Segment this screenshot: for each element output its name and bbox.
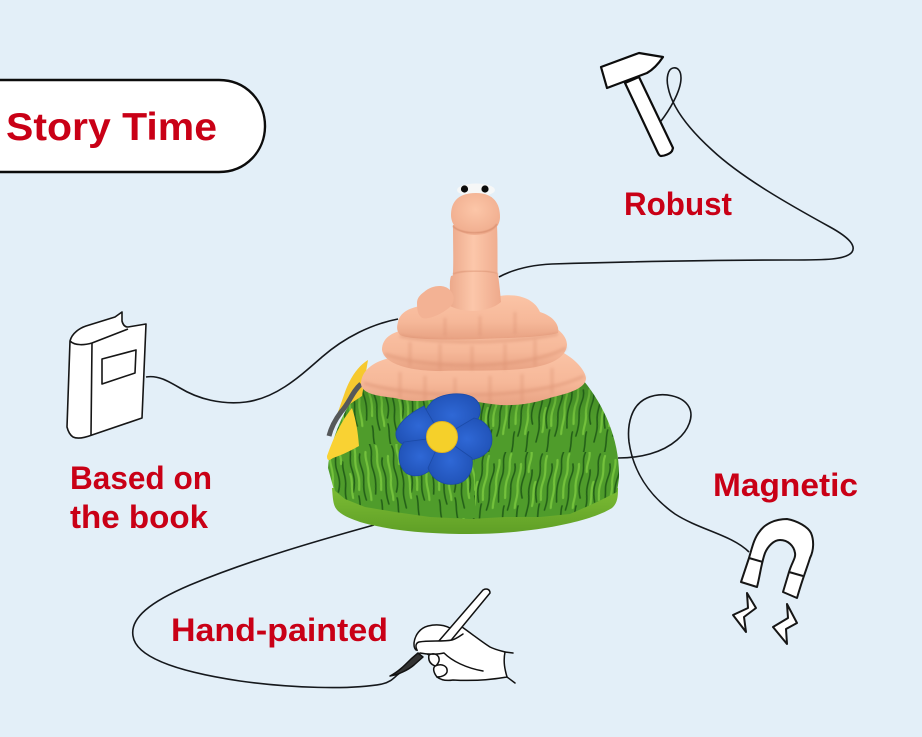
connector line: book xyxy=(146,319,398,403)
coil bottom xyxy=(361,349,586,405)
worm head xyxy=(451,193,500,235)
brush handle xyxy=(438,589,490,644)
worm eyes xyxy=(457,184,495,196)
blue flower xyxy=(396,394,492,484)
label: Hand-painted: Hand-painted xyxy=(171,612,388,648)
coil shading xyxy=(364,312,584,404)
worm lower neck xyxy=(450,272,501,311)
icon: book xyxy=(67,312,146,438)
icon: hammer xyxy=(601,53,673,156)
connector line: robust xyxy=(499,68,853,277)
grass base plate xyxy=(332,488,618,534)
paintbrush nib xyxy=(390,653,423,676)
butterfly xyxy=(327,360,368,460)
label: Based on the book: Based on xyxy=(70,460,212,496)
flower centre xyxy=(426,422,458,452)
label: Based on the book: the book xyxy=(70,499,208,535)
back of hand xyxy=(414,625,507,680)
connector line: hand-painted xyxy=(133,525,400,688)
label: Robust: Robust xyxy=(624,186,732,222)
icon: painting hand xyxy=(390,589,515,683)
coil top xyxy=(397,295,558,340)
title pill: Story Time xyxy=(0,80,265,172)
figure: worm on grass xyxy=(320,184,625,534)
coil middle xyxy=(382,322,567,371)
worm neck xyxy=(450,225,502,312)
fingers xyxy=(417,632,470,654)
bolt left xyxy=(733,593,756,632)
icon: magnet xyxy=(733,519,813,644)
small tail bump xyxy=(417,286,454,319)
grass dome xyxy=(328,382,620,519)
cuff xyxy=(505,652,515,683)
bolt right xyxy=(773,604,797,644)
title pill: Story Time: Story Time xyxy=(6,106,217,149)
label: Magnetic: Magnetic xyxy=(713,467,858,503)
connector line: magnetic xyxy=(618,395,749,552)
